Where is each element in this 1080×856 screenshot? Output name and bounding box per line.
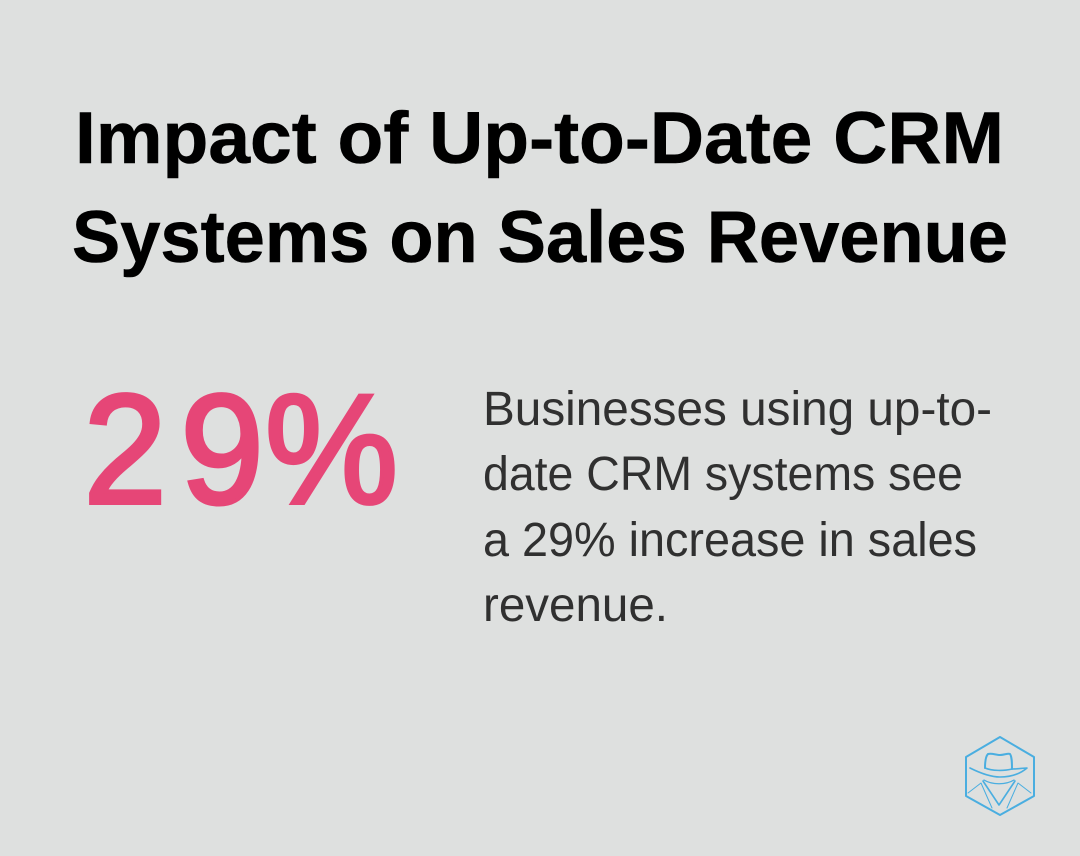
title: Systems on Sales Revenue: [72, 197, 1008, 278]
description text: [483, 383, 992, 632]
description text: revenue.: [483, 579, 668, 632]
description text: Businesses using up-to-: [483, 383, 992, 436]
title: [72, 98, 1008, 278]
title: Impact of Up-to-Date CRM: [75, 98, 1004, 179]
description text: date CRM systems see: [483, 448, 963, 501]
big stat: 29%: 29%: [84, 363, 398, 537]
description text: a 29% increase in sales: [483, 514, 977, 567]
icon: logo hexagon with hat: [966, 737, 1034, 815]
